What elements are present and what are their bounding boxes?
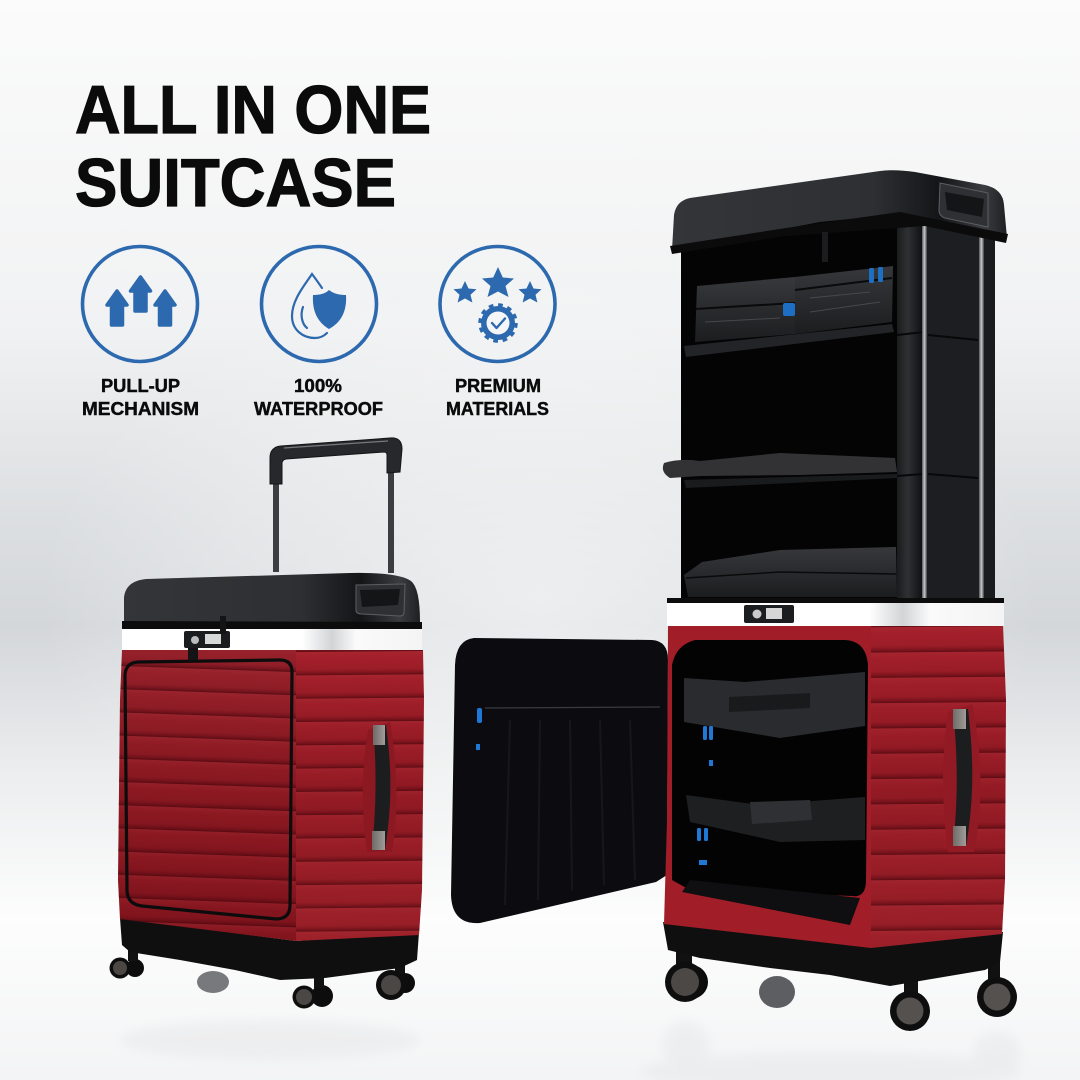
- blue zipper pulls: [697, 726, 713, 865]
- wheels: [110, 945, 415, 1008]
- zipper edge: [122, 621, 422, 629]
- label: 100% waterproof: WATERPROOF: [254, 399, 383, 419]
- floor reflections: [120, 1020, 1021, 1080]
- title: ALL IN ONE: [75, 72, 431, 148]
- top hard lid: [670, 170, 1008, 262]
- lower packing cube: [686, 795, 865, 842]
- white band: [122, 628, 422, 650]
- zip pull: [822, 232, 828, 262]
- icon: three up arrows in circle: [82, 246, 198, 362]
- feature: pull-up mechanism: [82, 246, 199, 419]
- black base: [663, 922, 1003, 986]
- shelf interior: [681, 210, 898, 598]
- red front face: [118, 650, 296, 941]
- top shelf cubes: [684, 266, 894, 357]
- label: pull-up mechanism: [82, 376, 199, 419]
- hard lid: [122, 573, 422, 629]
- label: 100% waterproof: 100%: [294, 376, 342, 396]
- title: [75, 72, 431, 221]
- icon: water drop with shield in circle: [262, 246, 376, 362]
- red side face with ribs: [296, 650, 424, 941]
- feature: waterproof: [254, 246, 383, 419]
- blue zipper pull: [476, 708, 482, 750]
- combination lock: [184, 616, 230, 660]
- label: 100% waterproof: [254, 376, 383, 419]
- zipper edge: [670, 212, 1008, 254]
- wheels: [665, 950, 1017, 1031]
- closed red suitcase: [110, 438, 424, 1008]
- open door panel: [451, 638, 668, 923]
- label: pull-up mechanism: MECHANISM: [82, 399, 199, 419]
- side carry handle: [363, 722, 397, 852]
- lid recessed handle: [939, 183, 988, 227]
- feature: premium materials: [440, 246, 555, 419]
- pop-up shelf tower: [663, 170, 1008, 598]
- icon: stars and badge in circle: [440, 246, 555, 362]
- front pocket with ribs: [125, 660, 292, 919]
- red ribbed side: [871, 625, 1006, 948]
- side carry handle: [943, 704, 981, 852]
- lid recessed handle: [356, 584, 405, 616]
- label: premium materials: [446, 376, 549, 419]
- bottom shelf cube: [684, 547, 897, 597]
- upper packing cube: [684, 672, 865, 738]
- black base: [120, 918, 419, 980]
- open compartment: [672, 640, 868, 925]
- middle shelf with rolled bag: [663, 453, 897, 488]
- side fabric panel: [897, 212, 995, 598]
- combination lock: [744, 605, 794, 623]
- label: premium materials: MATERIALS: [446, 399, 549, 419]
- title: SUITCASE: [75, 145, 396, 221]
- white band with lock: [667, 598, 1004, 626]
- red front frame: [664, 625, 871, 948]
- blue zipper pulls on cubes: [783, 267, 883, 316]
- opened red suitcase body: [663, 625, 1017, 1031]
- label: premium materials: PREMIUM: [455, 376, 541, 396]
- telescopic handle: [270, 438, 402, 573]
- label: pull-up mechanism: PULL-UP: [101, 376, 180, 396]
